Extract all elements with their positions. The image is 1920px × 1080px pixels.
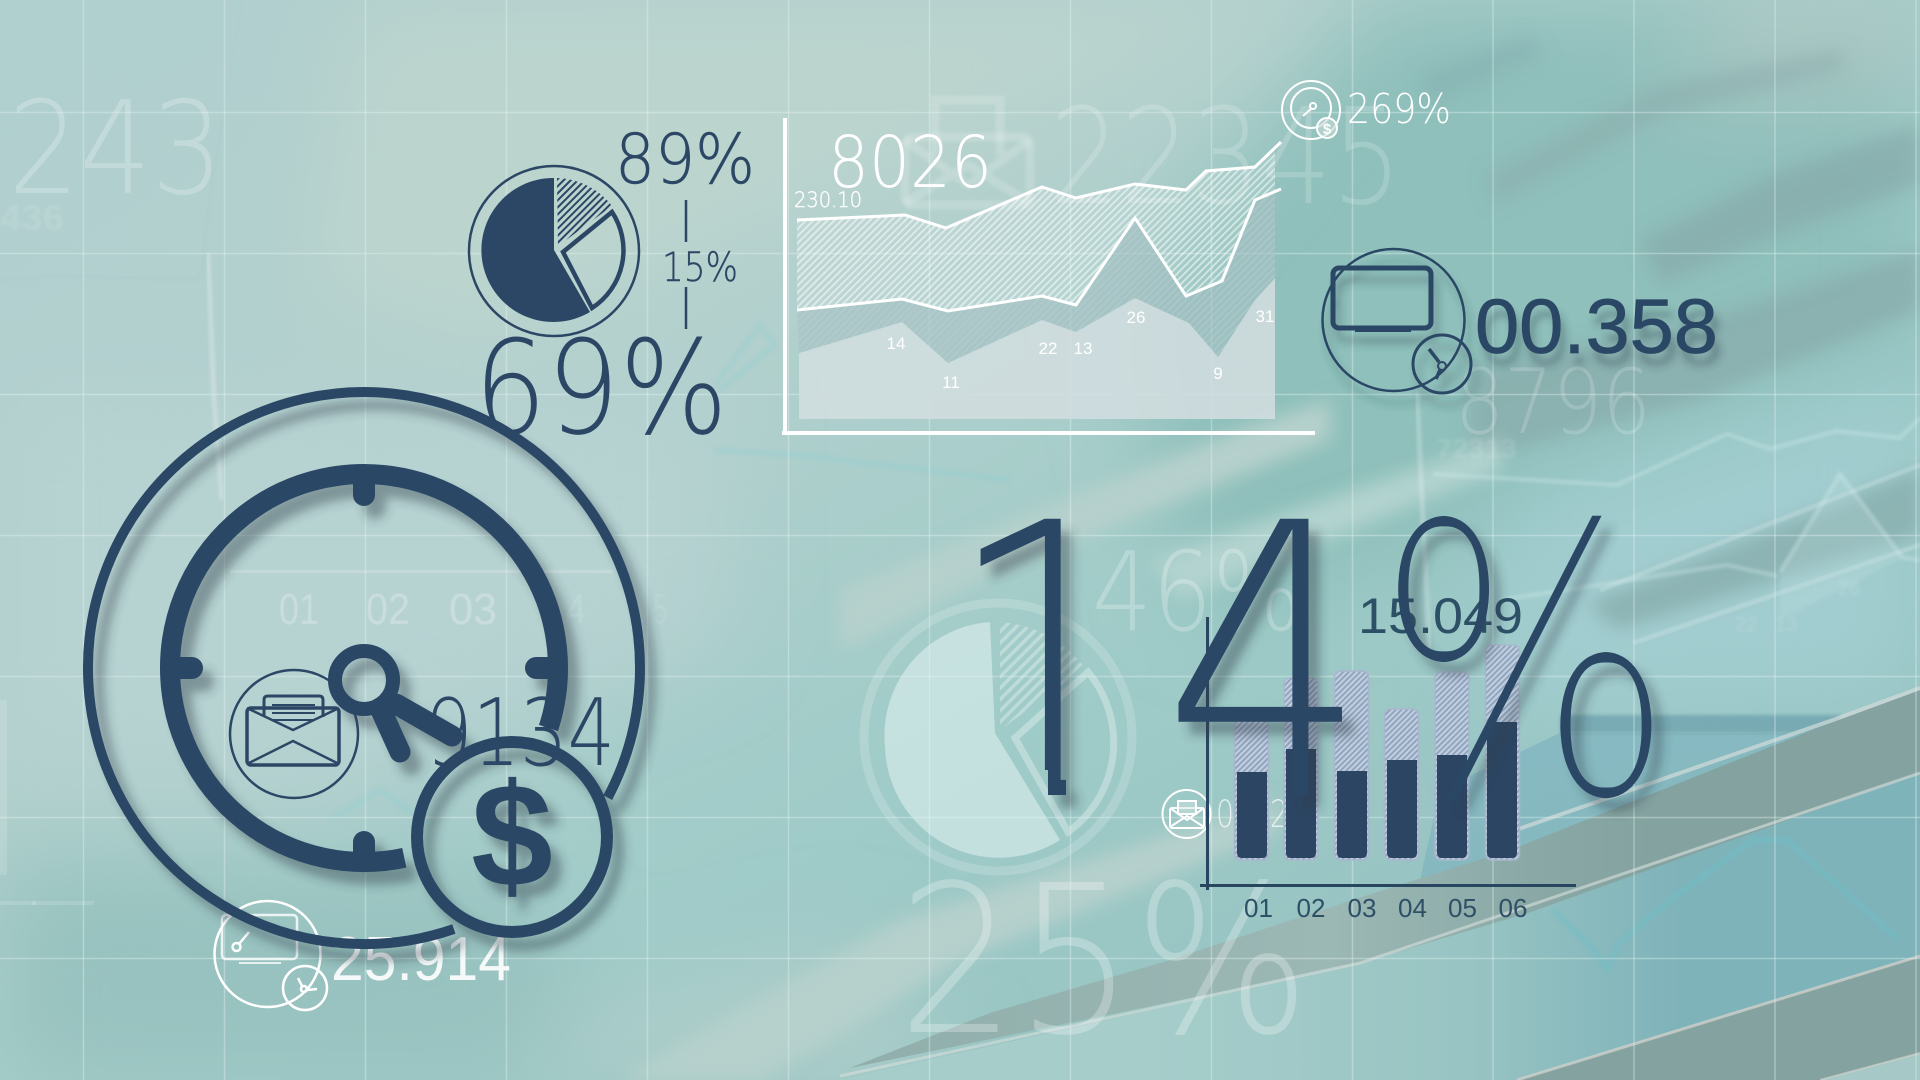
area: top hatched layer (797, 150, 1275, 311)
bar labels: 02 (1297, 893, 1325, 923)
stat: 00.358 with icon (1322, 249, 1718, 393)
ghost left frame (0, 700, 94, 905)
chart data labels: 14 (887, 334, 905, 353)
ghost bar labels in clock: 03 (449, 585, 497, 634)
chart subtitle: 230.10 (794, 188, 862, 212)
bar labels (1244, 893, 1527, 923)
panel: area chart (782, 118, 1315, 435)
headline stat: 14%: 1 (945, 444, 1150, 884)
ghost line chart right (1433, 418, 1920, 620)
hatched bars (1234, 645, 1520, 860)
bar chart value: 15.049 (1358, 588, 1523, 644)
ghost teal shapes centre (330, 325, 1010, 825)
icon: clock and dollar (1282, 81, 1340, 139)
bar labels: 03 (1348, 893, 1376, 923)
hard-edged bands (840, 773, 1920, 1080)
stat 15%: 15% (662, 245, 738, 291)
chart data labels: 13 (1074, 339, 1092, 358)
ghost axis right (1417, 393, 1430, 660)
ghost number 436: 436 (0, 197, 64, 238)
headline stat: 14%: 4 (1163, 444, 1368, 884)
axes (782, 118, 1315, 435)
thin light streaks (1600, 465, 1920, 643)
chart data labels: 22 (1039, 339, 1057, 358)
inner dial ring (170, 474, 558, 862)
pie icon (469, 166, 639, 336)
dollar coin (417, 742, 607, 932)
ghost number 72313: 72313 (1436, 433, 1517, 464)
ghost chart labels right: 13 (1775, 614, 1797, 636)
icon: clock and dollar: $ (1323, 121, 1332, 138)
ghost axis left (208, 253, 222, 500)
headline stat: 14% (980, 516, 1668, 816)
icon: monitor and clock (1322, 249, 1471, 393)
ghost teal line right (1553, 840, 1897, 969)
value 00.358: 00.358 (1475, 284, 1718, 370)
value 269%: 269% (1347, 85, 1451, 133)
headline stat: 14%: % (1372, 444, 1678, 884)
connector lines (685, 200, 687, 329)
bar chart (1162, 588, 1576, 923)
chart data labels: 9 (1213, 364, 1223, 383)
stat 69%: 69% (474, 312, 728, 464)
ghost bar labels in clock: 01 (279, 585, 319, 634)
ghost value behind bars: 0102 (1216, 793, 1288, 836)
ghost chart labels right (1735, 578, 1860, 636)
value 25.914: 25.914 (331, 925, 511, 994)
stat 89%: 89% (615, 120, 755, 200)
ghost percent 46%: 46% (1092, 528, 1302, 656)
stat: 269% with icon (1282, 81, 1451, 139)
icon: monitor key and clock, white (214, 901, 327, 1010)
stat: 9134: 9134 (425, 679, 615, 787)
outer ring (88, 392, 640, 944)
clock hands (335, 651, 452, 752)
ghost percent 25%: 25% (898, 841, 1310, 1080)
bar labels: 04 (1398, 893, 1427, 923)
ghost envelope icon (905, 100, 1030, 205)
ghost number 22345: 22345 (1050, 81, 1402, 235)
area: middle layer (797, 193, 1275, 363)
small envelope icon, white (1162, 790, 1210, 838)
bar labels: 06 (1499, 893, 1527, 923)
ghost bar labels in clock (230, 570, 667, 634)
panel: pie chart with percentages (469, 120, 755, 464)
stat: 25.914 with icon (214, 901, 511, 1010)
chart data labels: 11 (942, 373, 960, 392)
ghost pie chart (864, 603, 1132, 871)
ghost bar labels in clock: 5 (653, 585, 667, 634)
chart data labels: 31 (1256, 307, 1274, 326)
dial ticks (176, 480, 552, 857)
chart title 8026: 8026 (828, 121, 992, 204)
chart data labels (887, 307, 1274, 392)
ghost chart labels right: 22 (1735, 614, 1757, 636)
bar labels: 01 (1244, 893, 1273, 923)
ghost chart labels right: 26 (1838, 578, 1860, 600)
bar labels: 05 (1448, 893, 1477, 923)
solid bars (1237, 722, 1517, 858)
chart lines (797, 142, 1281, 311)
ghost bar labels in clock: 02 (366, 585, 410, 634)
chart data labels: 26 (1127, 308, 1145, 327)
big clock with dollar (88, 392, 640, 944)
ghost number 8796: 8796 (1455, 350, 1651, 455)
ghost bar labels in clock: 4 (566, 585, 586, 634)
ghost number 243: 243 (8, 75, 223, 224)
envelope icon in clock (230, 670, 358, 798)
area: bottom layer (799, 278, 1275, 419)
bar axes (1200, 617, 1576, 890)
dollar coin: $ (471, 754, 553, 918)
